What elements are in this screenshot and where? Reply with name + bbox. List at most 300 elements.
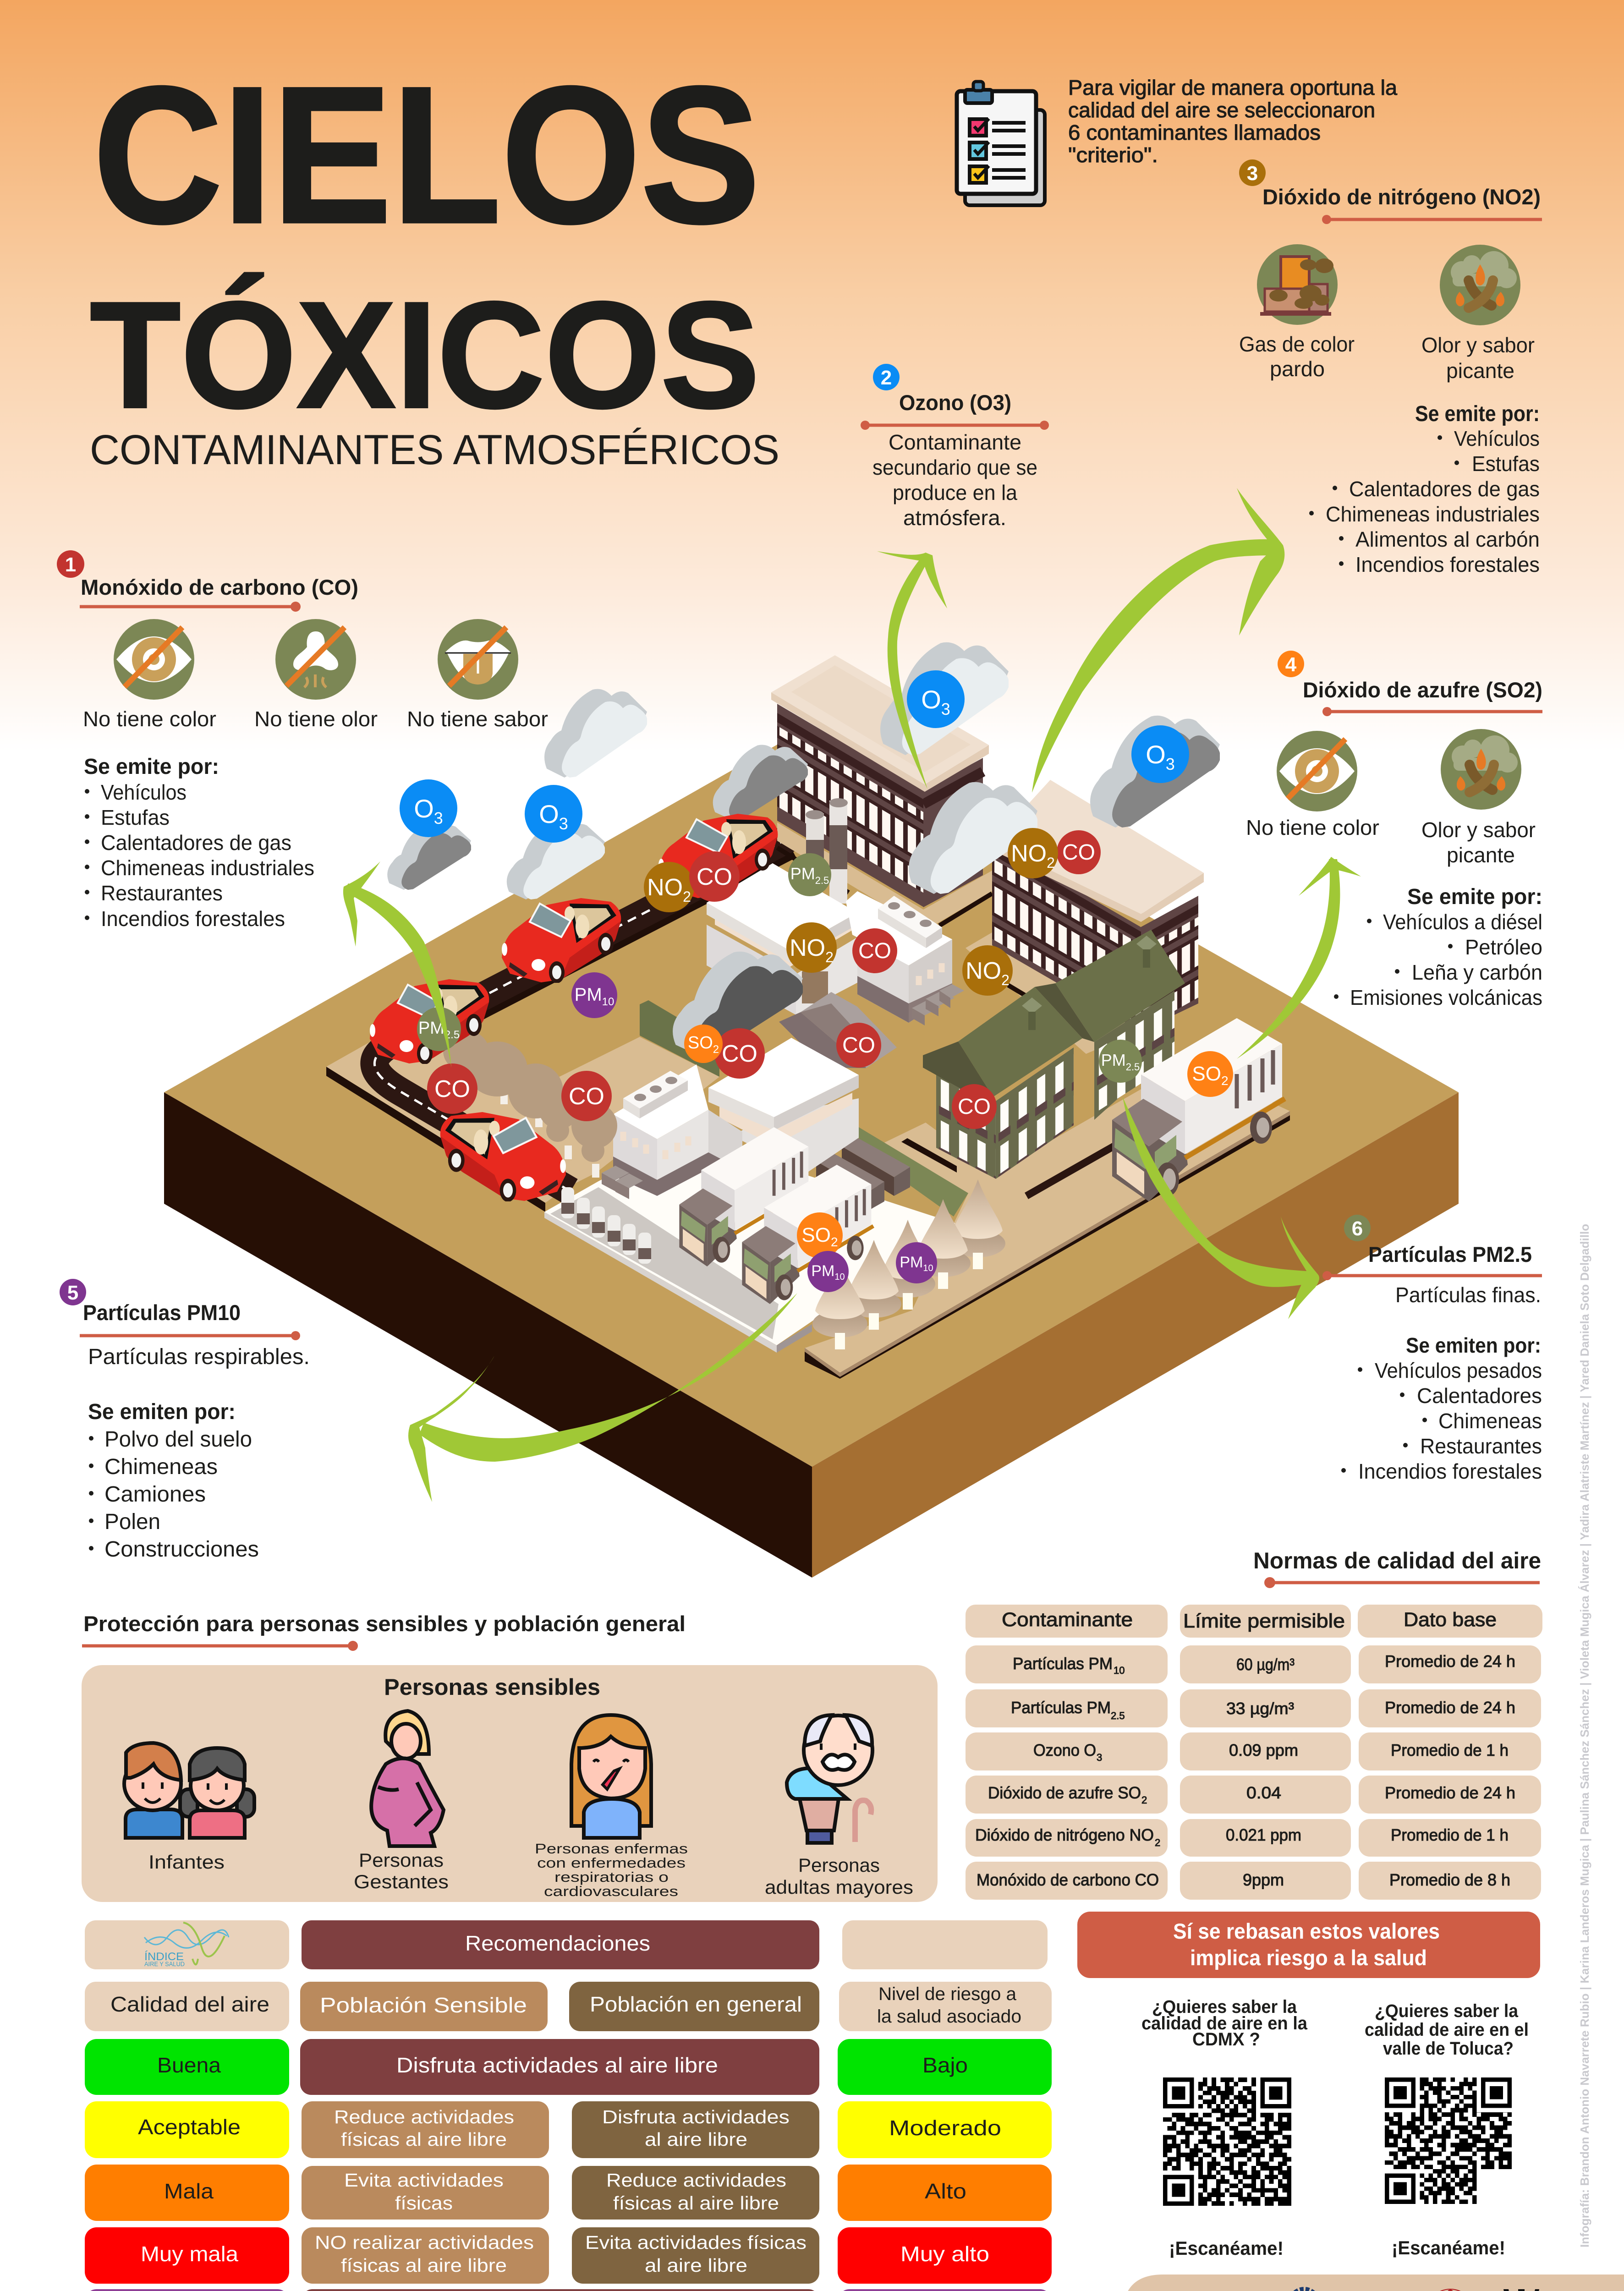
trees <box>812 1179 1005 1349</box>
badge 2: 2 <box>881 367 892 389</box>
persons labels: con enfermedades <box>537 1855 686 1871</box>
emission sources: Chimeneas industriales <box>1326 502 1540 526</box>
column: pollutant <box>975 1654 1160 1889</box>
column: pollutant: 2.5 <box>1111 1710 1125 1721</box>
emission sources <box>1334 885 1542 1009</box>
row: mala: Alto <box>925 2179 966 2203</box>
cloud: big dark centre <box>673 952 803 1055</box>
persons labels: Personas enfermas <box>535 1841 688 1857</box>
emission sources: Leña y carbón <box>1412 960 1542 984</box>
bubble: PM10: 10 <box>602 996 614 1008</box>
column: base data: Promedio de 1 h <box>1391 1741 1509 1759</box>
icon labels: picante <box>1447 843 1515 867</box>
arrow: to sulfur dioxide <box>1237 857 1361 1059</box>
callout: health risk <box>1077 1912 1540 1978</box>
scan caption: ¡Escanéame! <box>1169 2237 1284 2259</box>
emission sources: Polen <box>104 1510 160 1534</box>
QR code <box>1163 2077 1291 2206</box>
row: muy mala: físicas al aire libre <box>341 2255 507 2276</box>
bubble: O3: O <box>921 685 941 714</box>
bubble: O3 <box>400 779 457 837</box>
bubble: CO <box>836 1023 881 1068</box>
icon labels <box>1239 332 1535 383</box>
row: muy mala: Muy alto <box>900 2242 989 2266</box>
intro text: Para vigilar de manera oportuna la <box>1068 76 1397 99</box>
emission sources: Estufas <box>1472 452 1540 476</box>
emission sources: Restaurantes <box>1420 1434 1542 1458</box>
bubble: NO2: 2 <box>1001 972 1010 988</box>
persons labels <box>148 1841 913 1899</box>
bubble: PM2.5 <box>417 1007 461 1051</box>
emission sources: Emisiones volcánicas <box>1350 986 1542 1009</box>
emission sources: Incendios forestales <box>101 907 285 931</box>
pollutant bubbles <box>400 670 1233 1292</box>
icon: no smell <box>275 619 356 700</box>
emission sources: Petróleo <box>1465 935 1542 959</box>
bubble: O3: 3 <box>941 700 950 718</box>
header row <box>85 1920 1048 1969</box>
factory: central white <box>707 863 952 1023</box>
question <box>1141 1997 1308 2050</box>
isometric city scene <box>164 642 1459 1578</box>
row: muy mala: al aire libre <box>645 2255 747 2276</box>
badge 3: 3 <box>1247 162 1258 185</box>
icon labels: Olor y sabor <box>1421 333 1535 357</box>
sub-header row: Población en general <box>590 1992 802 2016</box>
panel: 2 ozone <box>861 364 1049 530</box>
question: valle de Toluca? <box>1383 2039 1514 2059</box>
green brick wall <box>640 1000 719 1077</box>
green brick wall front <box>859 1127 968 1217</box>
cloud: white top left <box>544 689 647 778</box>
persons labels: adultas mayores <box>765 1876 913 1898</box>
row: muy mala: NO realizar actividades <box>315 2232 534 2253</box>
column: base data: Promedio de 24 h <box>1385 1698 1515 1717</box>
bubble: PM2.5: PM <box>790 864 815 883</box>
emission sources <box>84 755 314 931</box>
icon: no color <box>1277 731 1357 811</box>
emission sources: Calentadores de gas <box>1349 477 1540 501</box>
row: muy mala: Muy mala <box>141 2242 238 2266</box>
description <box>872 430 1037 530</box>
row: mala: físicas <box>395 2192 453 2214</box>
heading: Monóxido de carbono (CO) <box>81 575 358 599</box>
heading: Dióxido de azufre (SO2) <box>1303 678 1542 702</box>
column: pollutant: Partículas PM <box>1011 1698 1111 1717</box>
bubble: CO <box>561 1071 612 1121</box>
description: Partículas finas. <box>1395 1283 1541 1307</box>
logo: índice aire y salud: ÍNDICE <box>144 1951 184 1963</box>
row: buena: Buena <box>157 2053 221 2077</box>
trucks: factory <box>679 1127 811 1266</box>
bubble: CO <box>689 851 740 902</box>
heading: protection <box>82 1611 686 1651</box>
column: pollutant: 10 <box>1114 1665 1125 1676</box>
bubble: NO2: NO <box>647 874 683 901</box>
intro text: "criterio". <box>1068 143 1158 167</box>
subtitle: CONTAMINANTES ATMOSFÉRICOS <box>90 427 779 473</box>
row: aceptable: Disfruta actividades <box>602 2106 790 2127</box>
column: limit <box>1226 1655 1301 1889</box>
emission sources: Vehículos <box>1454 427 1540 450</box>
emission sources: Vehículos a diésel <box>1383 910 1542 934</box>
right building <box>966 780 1204 1054</box>
green roof houses <box>923 930 1185 1179</box>
heading: Partículas PM2.5 <box>1368 1242 1532 1266</box>
bubble: SO2: 2 <box>831 1235 838 1249</box>
header row: Recomendaciones <box>465 1931 650 1955</box>
emission sources <box>1341 1333 1542 1483</box>
row: aceptable: al aire libre <box>645 2129 747 2150</box>
icon: no taste <box>438 619 518 700</box>
table cell backgrounds <box>966 1605 1542 1900</box>
panel: 3 nitrogen dioxide <box>1239 159 1542 576</box>
icon labels <box>83 707 548 731</box>
bubble: CO <box>714 1028 765 1079</box>
column: pollutant: 3 <box>1097 1752 1102 1763</box>
persons labels: respiratorias o <box>554 1869 669 1885</box>
bubble: PM2.5 <box>788 853 831 896</box>
icon labels: No tiene color <box>83 707 216 731</box>
intro text <box>1068 76 1397 167</box>
icon: clipboard checklist <box>957 82 1045 205</box>
badge 2 <box>873 364 900 390</box>
icon: older adult <box>787 1715 872 1843</box>
emission sources: Estufas <box>101 806 170 829</box>
title <box>90 46 779 473</box>
arrow: to nitrogen dioxide <box>1032 488 1284 793</box>
column: pollutant: Monóxido de carbono CO <box>977 1870 1159 1889</box>
column: limit: 0.09 ppm <box>1229 1741 1298 1759</box>
row: aceptable: Moderado <box>889 2116 1001 2140</box>
bubble: SO2: 2 <box>1221 1074 1229 1088</box>
bubble: PM10: 10 <box>834 1272 845 1282</box>
logo: CONAHCYT <box>1262 2290 1346 2291</box>
question: CDMX ? <box>1192 2029 1260 2050</box>
bubble: PM2.5: 2.5 <box>1126 1061 1140 1073</box>
table: air quality standards <box>966 1605 1542 1900</box>
bubble: PM10: PM <box>575 985 602 1005</box>
table header: Límite permisible <box>1183 1610 1345 1632</box>
bubble: NO2 <box>644 862 694 912</box>
column: base data <box>1385 1652 1515 1889</box>
bubble: NO2 <box>786 922 837 973</box>
bubble: CO: CO <box>569 1083 604 1110</box>
bubble: NO2 <box>962 945 1013 996</box>
column: base data: Promedio de 8 h <box>1389 1870 1510 1889</box>
bubble: SO2: SO <box>801 1224 831 1246</box>
bubble: CO <box>952 1084 997 1129</box>
panel: sensitive persons <box>82 1665 938 1902</box>
emission sources: Restaurantes <box>101 881 223 905</box>
icon: pregnant person <box>371 1711 444 1846</box>
emission sources: Incendios forestales <box>1358 1459 1542 1483</box>
bubble: PM10: PM <box>900 1254 923 1271</box>
column: base data: Promedio de 24 h <box>1385 1783 1515 1802</box>
bubble: PM2.5 <box>1099 1040 1142 1083</box>
title line: CIELOS: CIELOS <box>93 46 760 264</box>
question: ¿Quieres saber la <box>1152 1997 1297 2017</box>
question: ¿Quieres saber la <box>1375 2001 1519 2021</box>
cloud: dark grey right <box>1090 716 1220 828</box>
bubble: O3 <box>525 785 582 843</box>
row: muy mala <box>85 2227 1052 2284</box>
emission sources: Incendios forestales <box>1355 553 1540 576</box>
bubble: SO2 <box>1187 1051 1233 1097</box>
pyramid roof building <box>779 992 897 1068</box>
question: calidad de aire en la <box>1141 2013 1308 2033</box>
description: Contaminante <box>889 430 1021 454</box>
badge 1: 1 <box>65 554 76 576</box>
bubble: NO2 <box>1008 828 1058 878</box>
row: aceptable <box>85 2101 1052 2158</box>
bubble: O3: 3 <box>1166 755 1175 773</box>
bubble: SO2: SO <box>1192 1063 1221 1085</box>
badge 5: 5 <box>67 1282 78 1304</box>
factory: front <box>602 1038 859 1199</box>
heading: air quality standards: Normas de calidad del aire <box>1253 1548 1541 1573</box>
logos band <box>1123 2275 1624 2291</box>
icon labels: picante <box>1446 359 1514 383</box>
bubble: CO: CO <box>722 1041 757 1067</box>
badge 5 <box>60 1279 86 1305</box>
platform left side <box>164 1092 812 1578</box>
panel: 5 PM10 <box>60 1279 310 1562</box>
icon: spicy <box>1441 729 1521 810</box>
arrow: to PM2.5 <box>1123 1097 1319 1319</box>
cloud: grey left <box>387 823 472 890</box>
dark low buildings behind trucks <box>816 1138 910 1211</box>
icon labels: Gas de color <box>1239 332 1355 356</box>
callout: health risk: implica riesgo a la salud <box>1190 1946 1427 1970</box>
smoke puffs <box>443 1030 617 1178</box>
heading: air quality standards <box>1253 1548 1541 1588</box>
icon: brown gas <box>1257 244 1338 325</box>
bubble: O3: 3 <box>434 809 443 828</box>
bubble: PM10: PM <box>811 1262 834 1280</box>
heading: protection: Protección para personas sensibles y población general <box>83 1611 686 1636</box>
callout: health risk: Sí se rebasan estos valores <box>1173 1919 1440 1943</box>
title line: TÓXICOS: TÓXICOS <box>90 270 760 440</box>
bubble: NO2: 2 <box>1047 855 1055 871</box>
bubble: PM10 <box>807 1251 849 1292</box>
row: buena <box>85 2039 1052 2095</box>
emission sources: Construcciones <box>104 1537 259 1562</box>
scan caption: ¡Escanéame! <box>1392 2237 1505 2258</box>
column: base data: Promedio de 24 h <box>1385 1652 1515 1671</box>
sub-header row: Calidad del aire <box>110 1992 269 2016</box>
cloud: grey in front of back building <box>713 745 808 820</box>
badge 3 <box>1239 159 1266 186</box>
bubble: O3 <box>907 670 965 728</box>
chimneys <box>806 798 848 904</box>
emission sources: Se emite por: <box>84 755 219 779</box>
platform top <box>164 725 1459 1467</box>
bubble: SO2: SO <box>688 1033 713 1052</box>
emission sources: Calentadores <box>1417 1384 1542 1408</box>
icon: spicy <box>1440 245 1520 325</box>
persons labels: Infantes <box>148 1851 225 1873</box>
cylinder row <box>561 1187 651 1264</box>
description: produce en la <box>893 481 1017 504</box>
heading: Ozono (O3) <box>899 390 1011 415</box>
column: limit: 0.021 ppm <box>1226 1825 1301 1844</box>
logo: CACCM <box>1426 2289 1475 2291</box>
row: buena: Bajo <box>922 2053 968 2077</box>
row: mala: Mala <box>164 2179 214 2203</box>
column: pollutant: Dióxido de nitrógeno NO <box>975 1825 1154 1844</box>
persons labels: Personas <box>359 1849 444 1871</box>
table header: Dato base <box>1404 1609 1497 1631</box>
panel: 6 PM2.5 <box>1322 1215 1542 1483</box>
sub-header row <box>85 1982 1052 2031</box>
emission sources <box>88 1400 259 1562</box>
question <box>1365 2001 1529 2059</box>
arrow: to PM10 <box>408 1293 797 1502</box>
truck: right <box>1112 1018 1285 1201</box>
emission sources <box>1309 402 1540 576</box>
bubble: CO <box>852 928 897 973</box>
cloud: white over back building roof <box>880 642 1009 755</box>
bubble: NO2: NO <box>790 935 825 961</box>
emission sources: Calentadores de gas <box>101 831 291 855</box>
icon: children <box>124 1743 254 1838</box>
bubble: PM10 <box>896 1242 937 1283</box>
row: mala <box>85 2165 1052 2221</box>
description: secundario que se <box>872 455 1037 479</box>
sub-header row: Población Sensible <box>320 1993 527 2017</box>
bubble: CO: CO <box>434 1076 470 1102</box>
persons labels: Gestantes <box>354 1871 449 1892</box>
arrow: to ozone <box>877 551 947 789</box>
description: Partículas respirables. <box>88 1345 310 1369</box>
arrows <box>343 488 1361 1502</box>
bubble: CO: CO <box>697 864 732 890</box>
table: recommendations <box>85 1920 1052 2291</box>
table header <box>1002 1609 1497 1632</box>
emission sources: Se emiten por: <box>88 1400 236 1424</box>
row: buena: Disfruta actividades al aire libre <box>396 2053 718 2077</box>
logo: Facultad de Psicología <box>1495 2289 1548 2291</box>
emission sources: Polvo del suelo <box>104 1427 252 1452</box>
badge 4 <box>1278 651 1304 677</box>
persons labels: Personas <box>798 1854 880 1876</box>
emission sources: Se emiten por: <box>1406 1333 1541 1357</box>
badge 4: 4 <box>1285 653 1297 676</box>
bubble: SO2 <box>684 1025 723 1063</box>
column: pollutant: Dióxido de azufre SO <box>988 1783 1141 1802</box>
emission sources: Se emite por: <box>1407 885 1542 909</box>
bubble: PM2.5: PM <box>1101 1051 1126 1069</box>
QR code <box>1385 2077 1512 2204</box>
persons labels: cardiovasculares <box>544 1883 678 1899</box>
row: extremadamente mala <box>85 2289 1052 2291</box>
emission sources: Vehículos pesados <box>1375 1359 1542 1382</box>
bubble: NO2: 2 <box>683 888 691 905</box>
sub-header row: la salud asociado <box>877 2006 1021 2027</box>
bubble: O3 <box>1131 725 1189 783</box>
arrow: to carbon monoxide <box>343 861 451 1068</box>
row: aceptable: Reduce actividades <box>334 2106 514 2127</box>
icon labels: No tiene sabor <box>407 707 548 731</box>
bubble: CO: CO <box>958 1095 991 1119</box>
white factory plate <box>544 1136 955 1353</box>
question: calidad de aire en el <box>1365 2020 1529 2040</box>
cars <box>658 814 778 899</box>
cloud: white second <box>507 822 605 899</box>
bubble: PM10: 10 <box>923 1263 933 1273</box>
bubble: O3: 3 <box>559 814 568 833</box>
emission sources: Chimeneas <box>1438 1409 1542 1433</box>
description: atmósfera. <box>903 506 1006 530</box>
row: aceptable: físicas al aire libre <box>341 2129 507 2150</box>
column: limit: 0.04 <box>1246 1783 1281 1802</box>
bubble: CO: CO <box>842 1033 875 1058</box>
emission sources: Chimeneas industriales <box>101 856 314 880</box>
bubble: CO <box>427 1063 477 1114</box>
sidewalk with tree strip <box>805 1063 1290 1379</box>
road with cars lane <box>326 839 788 1212</box>
intro text: calidad del aire se seleccionaron <box>1068 98 1375 122</box>
icon labels: Olor y sabor <box>1421 818 1536 842</box>
heading: Partículas PM10 <box>83 1300 241 1325</box>
vertical credits: Infografía: Brandon Antonio Navarrete Rubio | Karina Landeros Mugica | Paulina Sánchez Sánchez | Violeta Mugica Álvarez | Yadira Alatriste Martínez | Yared Daniela Soto Delgadillo <box>1578 1224 1591 2247</box>
back building <box>771 655 992 930</box>
QR block: Toluca <box>1365 2001 1529 2258</box>
bubble: O3: O <box>1146 740 1166 769</box>
intro text: 6 contaminantes llamados <box>1068 121 1321 144</box>
emission sources: Alimentos al carbón <box>1355 527 1540 551</box>
bubble: SO2: 2 <box>713 1043 719 1056</box>
bubble: NO2: 2 <box>825 949 834 965</box>
panel: 1 carbon monoxide <box>57 550 548 931</box>
row: mala: físicas al aire libre <box>613 2192 779 2214</box>
icon: sick person <box>571 1715 651 1838</box>
bubble: O3: O <box>539 800 559 828</box>
cloud: white centre <box>909 782 1038 894</box>
bubble: CO: CO <box>858 939 891 963</box>
bubble: PM2.5: 2.5 <box>815 875 829 886</box>
column: pollutant: Partículas PM <box>1013 1654 1113 1673</box>
emission sources: Se emite por: <box>1415 402 1540 426</box>
icon labels: No tiene color <box>1246 816 1379 839</box>
heading: Dióxido de nitrógeno (NO2) <box>1262 185 1541 209</box>
table header: Contaminante <box>1002 1609 1133 1631</box>
bubble: SO2 <box>797 1212 843 1258</box>
platform right side <box>812 1092 1459 1578</box>
column: pollutant: 2 <box>1155 1837 1160 1848</box>
sub-header row: Nivel de riesgo a <box>878 1984 1017 2004</box>
bubble: NO2: NO <box>966 958 1001 984</box>
row: aceptable: Aceptable <box>138 2115 241 2139</box>
bubble: NO2: NO <box>1011 840 1047 867</box>
icon labels <box>1246 816 1536 867</box>
column: pollutant: Ozono O <box>1033 1741 1096 1759</box>
bubble: PM2.5: PM <box>418 1019 444 1038</box>
row: muy mala: Evita actividades físicas <box>585 2232 807 2253</box>
column: pollutant: 2 <box>1141 1794 1147 1806</box>
bubble: CO <box>1057 830 1101 874</box>
badge 6 <box>1344 1215 1371 1241</box>
column: limit: 60 µg/m³ <box>1236 1655 1295 1674</box>
QR block: CDMX <box>1141 1997 1308 2259</box>
column: base data: Promedio de 1 h <box>1391 1825 1509 1844</box>
emission sources: Camiones <box>104 1482 206 1507</box>
bubble: PM10 <box>571 972 617 1018</box>
emission sources: Chimeneas <box>104 1455 218 1479</box>
icon labels: No tiene olor <box>254 707 378 731</box>
small grey boxes <box>912 984 964 1015</box>
